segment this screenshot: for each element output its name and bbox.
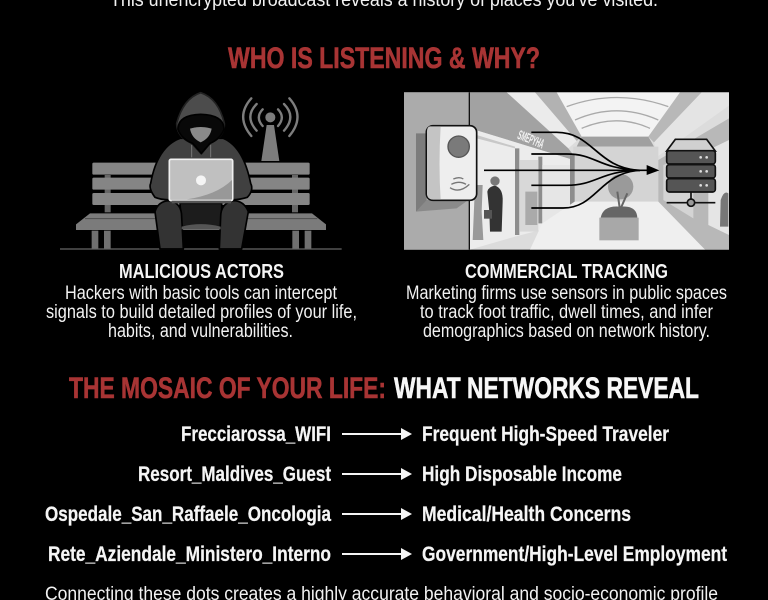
row: Resort Maldives: [138, 463, 622, 486]
laptop: [169, 159, 233, 201]
text block: commercial tracking: COMMERCIAL TRACKING: [465, 261, 668, 283]
floor: [530, 202, 705, 250]
row: Ospedale: Ospedale_San_Raffaele_Oncologia: [45, 503, 331, 526]
row: Resort Maldives: High Disposable Income: [422, 463, 622, 486]
shoppers: [487, 186, 503, 232]
row: Rete Aziendale: Rete_Aziendale_Ministero_Interno: [48, 543, 331, 566]
row: Frecciarossa: [181, 423, 669, 446]
text block: malicious actors: Hackers with basic tools can intercept: [65, 283, 338, 304]
text block: commercial tracking: demographics based on network history.: [423, 321, 710, 342]
mall background: [404, 92, 729, 250]
panel: commercial tracking illustration: SMEPYHA: [516, 127, 547, 151]
bench: [60, 163, 342, 249]
wall: [404, 92, 469, 250]
text block: commercial tracking: to track foot traffic, dwell times, and infer: [420, 302, 714, 323]
icon: server stack: [667, 139, 715, 206]
torso and arms: [150, 138, 252, 200]
row: Rete Aziendale: [48, 543, 727, 566]
row: Resort Maldives: Resort_Maldives_Guest: [138, 463, 331, 486]
row: Frecciarossa: Frequent High-Speed Traveler: [422, 423, 669, 446]
text block: malicious actors: signals to build detailed profiles of your life,: [46, 302, 357, 323]
row: Ospedale: [45, 503, 631, 526]
storefront: [470, 128, 573, 250]
heading: mosaic of your life: THE MOSAIC OF YOUR LIFE:: [69, 372, 386, 405]
row: Ospedale: Medical/Health Concerns: [422, 503, 631, 526]
hood: [177, 93, 224, 154]
icon: broadcast antenna: [243, 98, 297, 161]
list: network names and inferences: [45, 423, 727, 566]
text block: commercial tracking: [406, 261, 727, 342]
icon: wall sensor: [416, 126, 477, 212]
panel: malicious actors illustration: [60, 93, 342, 249]
heading: mosaic of your life: [69, 372, 699, 405]
hooded figure: [150, 93, 252, 249]
text block: malicious actors: MALICIOUS ACTORS: [119, 261, 284, 283]
legs: [180, 203, 222, 227]
row: Frecciarossa: Frecciarossa_WIFI: [181, 423, 331, 446]
text block: malicious actors: [46, 261, 357, 342]
heading: who is listening: WHO IS LISTENING & WHY?: [228, 42, 540, 75]
arrows: converging data lines: [484, 132, 659, 208]
planter with tree: [599, 174, 639, 240]
text block: malicious actors: habits, and vulnerabilities.: [108, 321, 293, 342]
mall ceiling: [557, 92, 680, 137]
panel: commercial tracking illustration: [404, 92, 729, 250]
